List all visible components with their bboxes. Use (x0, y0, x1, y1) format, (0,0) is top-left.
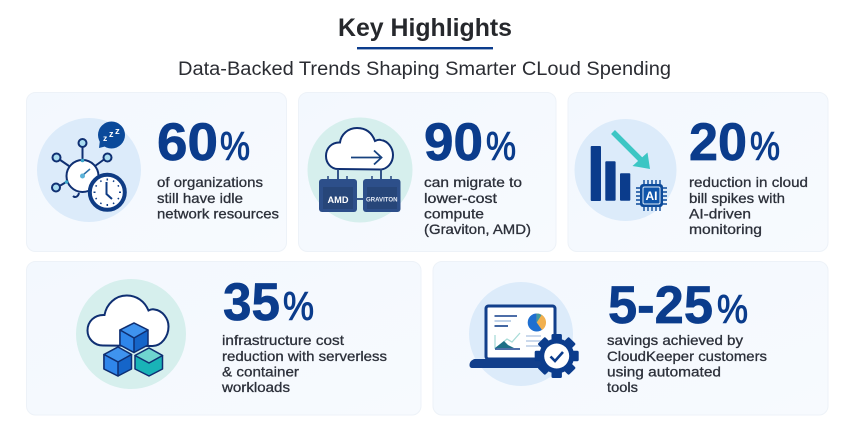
description (221, 332, 387, 395)
description: (Graviton, AMD) (424, 221, 531, 237)
description: AI-driven (689, 206, 751, 222)
description: tools (607, 379, 638, 395)
stat: 20%: 20 (689, 113, 747, 172)
description (607, 332, 767, 395)
description: infrastructure cost (222, 332, 344, 348)
description: lower-cost (424, 190, 497, 206)
stat: 35% (223, 273, 314, 332)
description: can migrate to (424, 174, 522, 190)
title: Key Highlights (338, 14, 512, 42)
icon: cloud and chips (308, 118, 412, 222)
icon: declining bars and AI chip (574, 119, 676, 221)
stat: 20%: % (750, 125, 780, 169)
panel: AI-driven monitoring (568, 92, 828, 252)
description: bill spikes with (689, 190, 785, 206)
description: CloudKeeper customers (607, 348, 767, 364)
description (689, 174, 808, 237)
stat: 90%: 90 (424, 113, 483, 172)
description: of organizations (157, 174, 263, 190)
stat: 90% (424, 113, 516, 172)
description: compute (424, 206, 484, 222)
icon: sleeping network and clock: z (109, 129, 114, 139)
icon: cloud with cubes (76, 279, 186, 389)
description: still have idle (157, 190, 243, 206)
icon: laptop dashboard with gear (469, 282, 579, 386)
icon: declining bars and AI chip: AI (646, 189, 658, 203)
subtitle: Data-Backed Trends Shaping Smarter CLoud Spending (178, 59, 671, 80)
stat: 90%: % (486, 125, 516, 169)
description: savings achieved by (607, 332, 743, 348)
icon: sleeping network and clock: z (115, 126, 120, 137)
icon: cloud and chips: GRAVITON (366, 198, 398, 204)
icon: sleeping network and clock (37, 118, 141, 222)
stat: 60%: % (220, 125, 250, 169)
panel: lower-cost compute (298, 92, 556, 252)
description: reduction in cloud (689, 174, 808, 190)
description: network resources (157, 206, 279, 222)
icon: sleeping network and clock: z (103, 133, 107, 143)
description (424, 174, 531, 237)
stat: 5-25%: 5-25 (608, 276, 713, 335)
stat: 60%: 60 (157, 113, 218, 172)
description: & container (222, 364, 299, 380)
stat: 5-25%: % (717, 288, 748, 332)
icon: cloud and chips: AMD (328, 195, 349, 205)
panel: serverless and containers (26, 262, 421, 415)
panel: idle network resources (26, 92, 286, 252)
title underline (357, 47, 493, 49)
stat: 60% (157, 113, 250, 172)
stat: 35%: % (283, 285, 314, 329)
stat: 20% (689, 113, 780, 172)
stat: 35%: 35 (223, 273, 280, 332)
panel: automated tools savings (433, 262, 828, 415)
description: reduction with serverless (222, 348, 387, 364)
description: workloads (221, 379, 290, 395)
description: using automated (607, 364, 721, 380)
description: monitoring (689, 221, 762, 237)
description (157, 174, 279, 222)
